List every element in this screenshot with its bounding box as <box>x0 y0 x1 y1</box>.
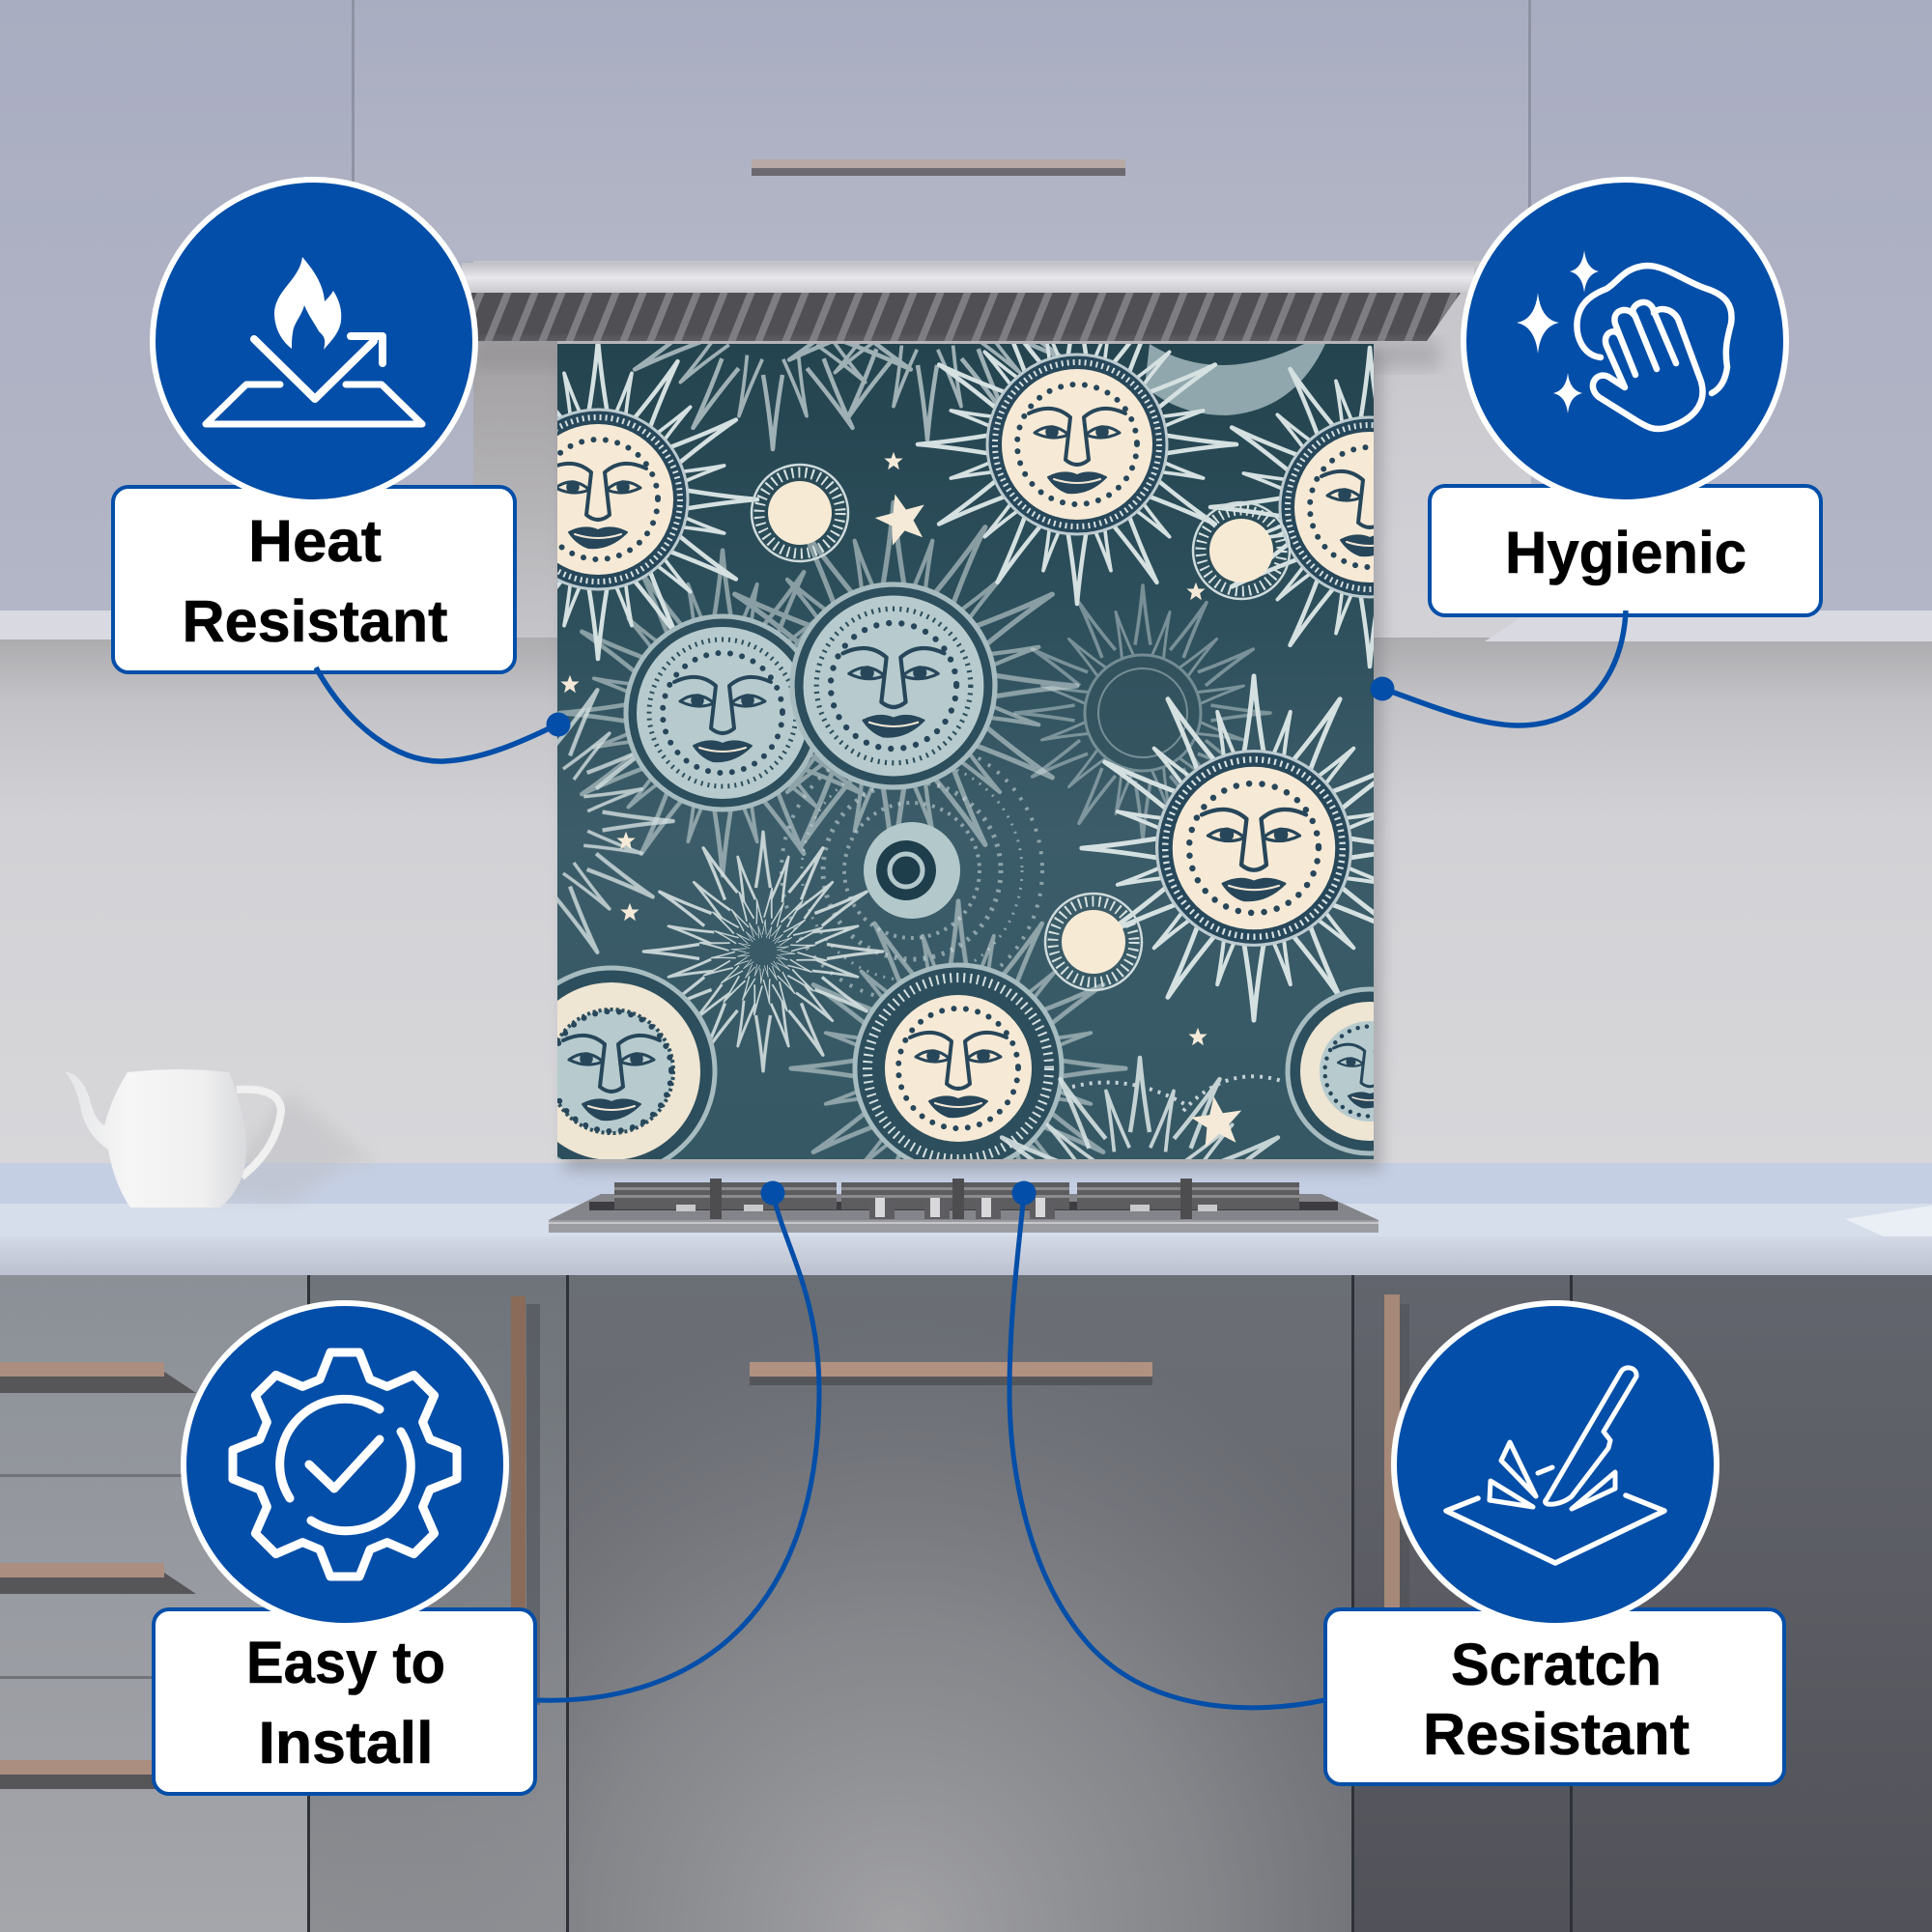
wall <box>0 261 1932 1169</box>
hood shadow <box>473 340 1439 369</box>
small disc sun 1 <box>752 465 848 561</box>
knobs <box>869 1198 1055 1219</box>
bottom left coin <box>557 966 717 1159</box>
circle <box>184 1303 506 1626</box>
hood vent <box>471 293 1461 341</box>
faded sun <box>1013 583 1272 838</box>
callout: easy to install <box>154 1180 819 1794</box>
label box <box>113 487 515 672</box>
cooktop <box>549 1179 1378 1233</box>
circle <box>153 180 475 502</box>
label line 2: Install <box>259 1710 433 1776</box>
small disc sun 2 <box>1193 502 1290 599</box>
counter back <box>0 1163 1932 1206</box>
cooktop plate <box>549 1194 1378 1233</box>
connector <box>316 668 557 761</box>
panel shadow <box>565 352 1381 1171</box>
cabinet seams <box>307 1275 1573 1932</box>
anchor dot <box>1370 676 1395 701</box>
right side wall <box>1374 638 1932 1164</box>
icon: gear with check <box>233 1352 457 1577</box>
counter front edge <box>0 1236 1932 1275</box>
counter top <box>0 1204 1932 1238</box>
connector <box>1009 1193 1324 1708</box>
right cabinet lip <box>1485 611 1932 641</box>
right upper cabinet <box>1531 0 1932 611</box>
pale rays behind moons <box>557 500 1080 878</box>
drawer handles left <box>0 1362 196 1789</box>
callout: heat resistant <box>113 180 570 761</box>
anchor dot <box>1012 1180 1036 1206</box>
anchor dot <box>761 1180 784 1206</box>
top ray band <box>632 344 1062 452</box>
sun left <box>380 281 816 718</box>
lower cabinet glow <box>309 1275 1353 1932</box>
icon: knife scratching a surface <box>1446 1368 1664 1563</box>
moon centre <box>792 584 995 787</box>
vertical handle left <box>511 1296 540 1705</box>
left cabinet lip <box>0 611 473 639</box>
label: Heat <box>248 508 382 574</box>
bottom swirl <box>1072 1076 1285 1111</box>
lower cabinet centre <box>568 1275 1353 1932</box>
label box <box>1325 1609 1784 1784</box>
label box <box>154 1609 535 1794</box>
eye swirl <box>781 740 1042 1001</box>
lower cabinet left <box>0 1275 309 1932</box>
sun top centre <box>859 226 1295 663</box>
stars <box>560 452 1246 1149</box>
sun right lower <box>1018 612 1490 1084</box>
cooktop recess <box>589 1202 1338 1210</box>
cooktop front strip <box>549 1220 1378 1233</box>
centre upper cabinet <box>355 0 1529 261</box>
anchor dot <box>547 713 570 736</box>
left edge rays <box>557 688 676 954</box>
circle <box>1463 180 1786 502</box>
left cabinet door seam <box>352 0 355 263</box>
label: Easy to <box>246 1630 445 1695</box>
connector <box>1383 611 1626 725</box>
centre lower handle <box>750 1362 1152 1385</box>
counter right object <box>1845 1206 1932 1236</box>
spiky burst <box>641 831 885 1072</box>
icon: hand wiping with sparkles <box>1517 250 1732 429</box>
left side wall <box>0 638 557 1164</box>
bottom right coin <box>1285 987 1374 1155</box>
drawer seams <box>0 1474 307 1679</box>
moon left <box>626 616 819 810</box>
small disc sun 3 <box>1045 894 1142 990</box>
hood front <box>462 263 1474 293</box>
label: Hygienic <box>1505 520 1747 585</box>
bottom floor rays <box>999 1055 1281 1159</box>
teapot <box>65 1069 377 1208</box>
panel background <box>557 344 1374 1159</box>
circle <box>1394 1303 1717 1626</box>
lower cabinet right <box>1572 1275 1932 1932</box>
vertical handle right <box>1384 1294 1409 1642</box>
upper handle <box>752 159 1125 176</box>
callout: scratch resistant <box>1009 1180 1784 1784</box>
bottom centre coin <box>788 898 1128 1159</box>
left upper cabinet <box>0 0 473 611</box>
lower cabinet left middle <box>309 1275 568 1932</box>
sun right edge <box>949 344 1374 668</box>
label line 2: Resistant <box>1423 1701 1690 1767</box>
top right crescent <box>1145 344 1325 415</box>
shaded wall left of panel <box>473 341 557 640</box>
icon: flame and reflecting arrow <box>206 257 422 424</box>
label line 2: Resistant <box>182 588 448 654</box>
callout: hygienic <box>1370 180 1821 725</box>
right cabinet door seam <box>1528 0 1531 263</box>
label: Scratch <box>1451 1632 1662 1697</box>
connector <box>537 1193 819 1700</box>
grates <box>614 1179 1299 1219</box>
label box <box>1430 486 1821 615</box>
panel: celestial splashback <box>557 344 1374 1159</box>
lower cabinet right door <box>1353 1275 1572 1932</box>
